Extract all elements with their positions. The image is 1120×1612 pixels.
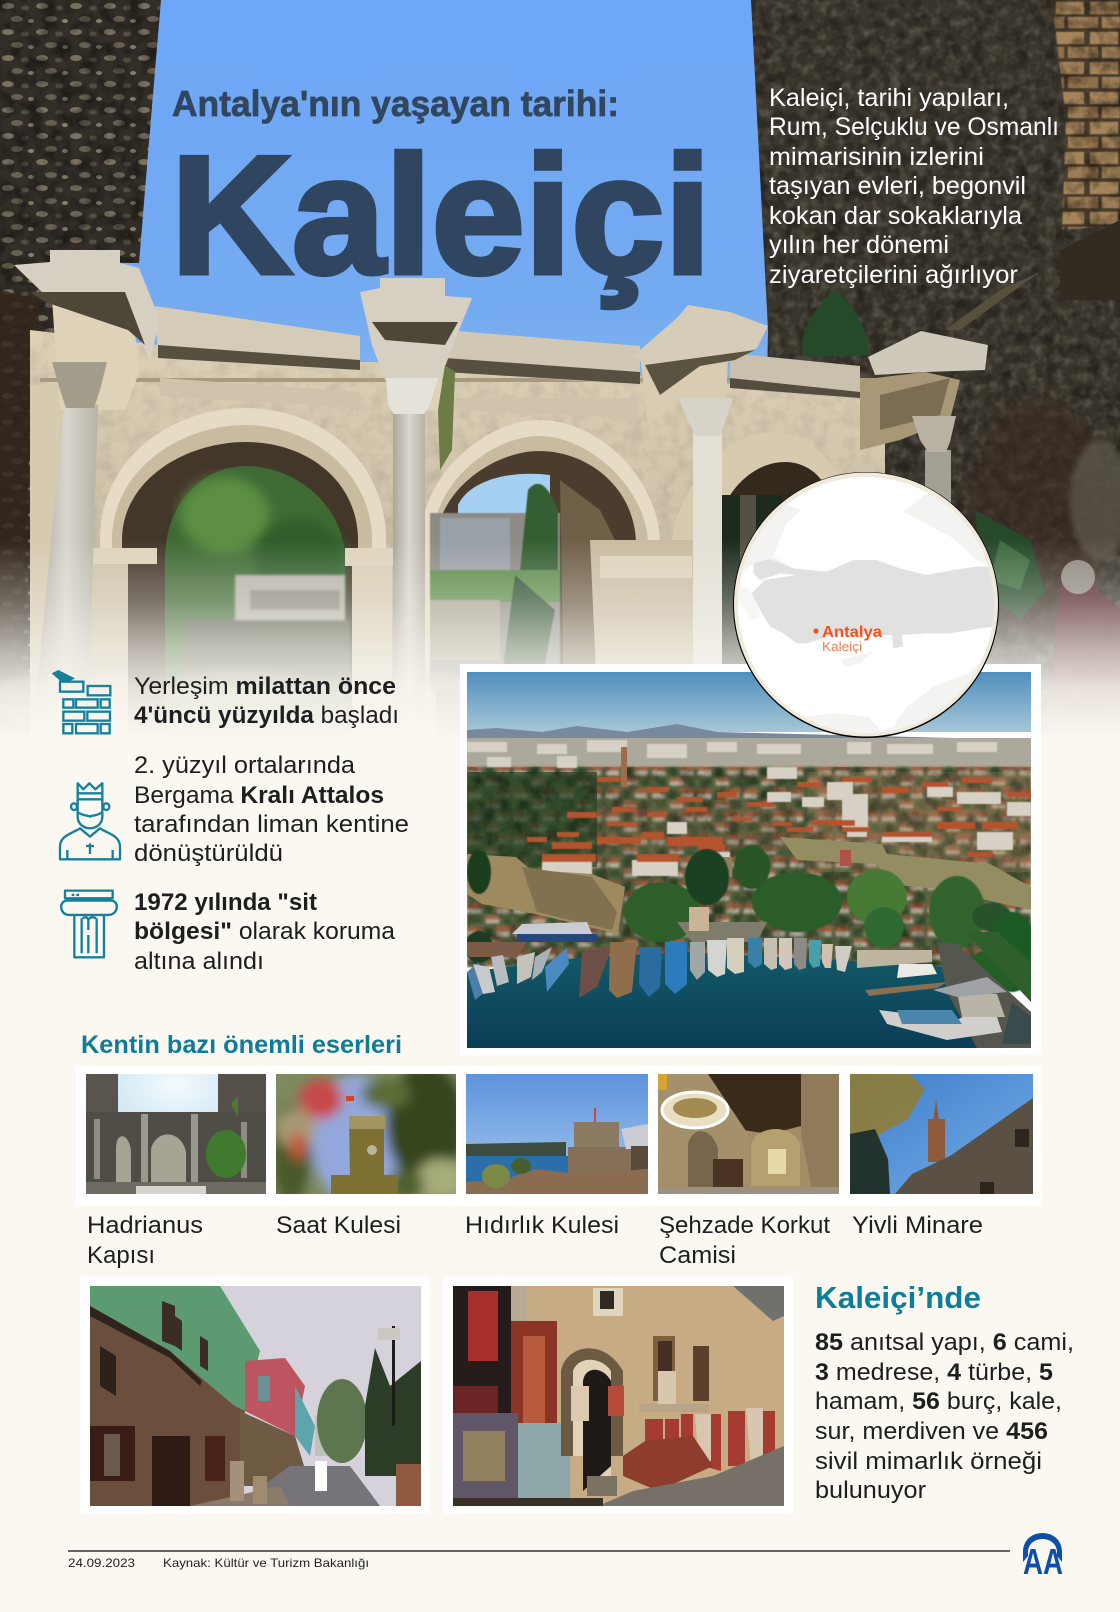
intro text block: Kaleiçi, tarihi yapıları, <box>769 84 1009 112</box>
entablature <box>155 306 360 372</box>
text: protected site: 1972 yılında "sit <box>134 889 317 916</box>
trees <box>465 845 1037 994</box>
Türkiye <box>752 559 997 648</box>
text: monuments statistics: 85 anıtsal yapı, 6 cami, <box>815 1329 1074 1356</box>
arch 2 <box>420 420 660 760</box>
title: Kaleiçi: Kaleiçi <box>171 121 711 309</box>
panel: carpet shop photo <box>443 1277 793 1514</box>
text: monuments statistics: sur, merdiven ve 456 <box>815 1418 1048 1445</box>
panel: harbour photo <box>460 664 1041 1055</box>
captions: landmarks <box>87 1212 983 1269</box>
stone cliffs and walls <box>467 854 625 934</box>
captions: landmarks: Hadrianus <box>87 1212 203 1239</box>
text: monuments statistics <box>815 1329 1074 1504</box>
text: Attalos: dönüştürüldü <box>134 840 283 867</box>
intro text block: yılın her dönemi <box>769 231 949 259</box>
logo: AA: AA <box>1023 1541 1063 1582</box>
visitor <box>1045 570 1120 760</box>
panel: street photo <box>80 1277 430 1514</box>
footer rule and credits: Kaynak: Kültür ve Turizm Bakanlığı <box>163 1556 369 1570</box>
columns <box>34 405 98 720</box>
captions: landmarks: Camisi <box>659 1242 736 1269</box>
thumbnail: Şehzade Korkut Camisi <box>658 1074 839 1194</box>
arch 1 <box>100 408 386 760</box>
thumbnail: Yivli Minare <box>850 1074 1033 1194</box>
text: protected site: bölgesi" olarak koruma <box>134 918 396 945</box>
captions: landmarks: Hıdırlık Kulesi <box>465 1212 619 1239</box>
heading: landmarks: Kentin bazı önemli eserleri <box>81 1031 402 1059</box>
heading: Kaleiçi'nde: Kaleiçi’nde <box>815 1280 981 1315</box>
captions: landmarks: Şehzade Korkut <box>659 1212 830 1239</box>
thumbnail: Hadrianus Kapısı <box>86 1074 266 1194</box>
harbour <box>467 952 1031 1048</box>
piers <box>590 540 694 760</box>
icon: column <box>61 891 117 957</box>
text: monuments statistics: bulunuyor <box>815 1477 926 1504</box>
text: settlement: 4'üncü yüzyılda başladı <box>134 702 399 729</box>
logo: AA <box>1023 1533 1063 1582</box>
intro text block: ziyaretçilerini ağırlıyor <box>769 261 1018 289</box>
thumbnail: Saat Kulesi <box>276 1074 456 1194</box>
text: monuments statistics: sivil mimarlık örneği <box>815 1448 1042 1475</box>
map label Kaleiçi: Kaleiçi <box>822 639 862 654</box>
text: Attalos: Bergama Kralı Attalos <box>134 782 384 809</box>
text: settlement <box>134 673 399 729</box>
foliage right <box>975 510 1045 620</box>
icon: king <box>60 783 120 859</box>
footer rule and credits: 24.09.2023 <box>68 1556 135 1570</box>
intro text block: taşıyan evleri, begonvil <box>769 172 1026 200</box>
text: protected site <box>134 889 396 975</box>
text: protected site: altına alındı <box>134 948 264 975</box>
flowers <box>0 668 470 728</box>
footer rule and credits <box>68 1551 1010 1570</box>
map inset <box>733 472 1002 743</box>
hero photo: Hadrian's Gate <box>0 0 1120 770</box>
intro text block <box>769 84 1059 289</box>
captions: landmarks: Kapısı <box>87 1242 155 1269</box>
map marker <box>813 628 819 634</box>
neighbouring land <box>743 494 987 733</box>
captions: landmarks: Saat Kulesi <box>276 1212 401 1239</box>
intro text block: Rum, Selçuklu ve Osmanlı <box>769 113 1059 141</box>
text: settlement: Yerleşim milattan önce <box>134 673 396 700</box>
map label Antalya: Antalya <box>822 624 882 641</box>
text: monuments statistics: hamam, 56 burç, kale, <box>815 1388 1062 1415</box>
icon: bricks <box>52 670 110 733</box>
green plant on wall <box>802 290 868 357</box>
title: subtitle: Antalya'nın yaşayan tarihi: <box>172 83 619 124</box>
text: Attalos <box>134 752 409 867</box>
thumbnail: Hıdırlık Kulesi <box>466 1074 648 1194</box>
text: monuments statistics: 3 medrese, 4 türbe, 5 <box>815 1359 1053 1386</box>
captions: landmarks: Yivli Minare <box>852 1212 983 1239</box>
vine <box>438 365 455 470</box>
intro text block: kokan dar sokaklarıyla <box>769 202 1022 230</box>
body of gate <box>30 330 885 760</box>
panel: landmark thumbnails <box>76 1064 1042 1206</box>
text: Attalos: 2. yüzyıl ortalarında <box>134 752 356 779</box>
intro text block: mimarisinin izlerini <box>769 143 984 171</box>
text: Attalos: tarafından liman kentine <box>134 811 409 838</box>
boats <box>467 938 1031 1044</box>
arch 3 <box>672 432 845 760</box>
